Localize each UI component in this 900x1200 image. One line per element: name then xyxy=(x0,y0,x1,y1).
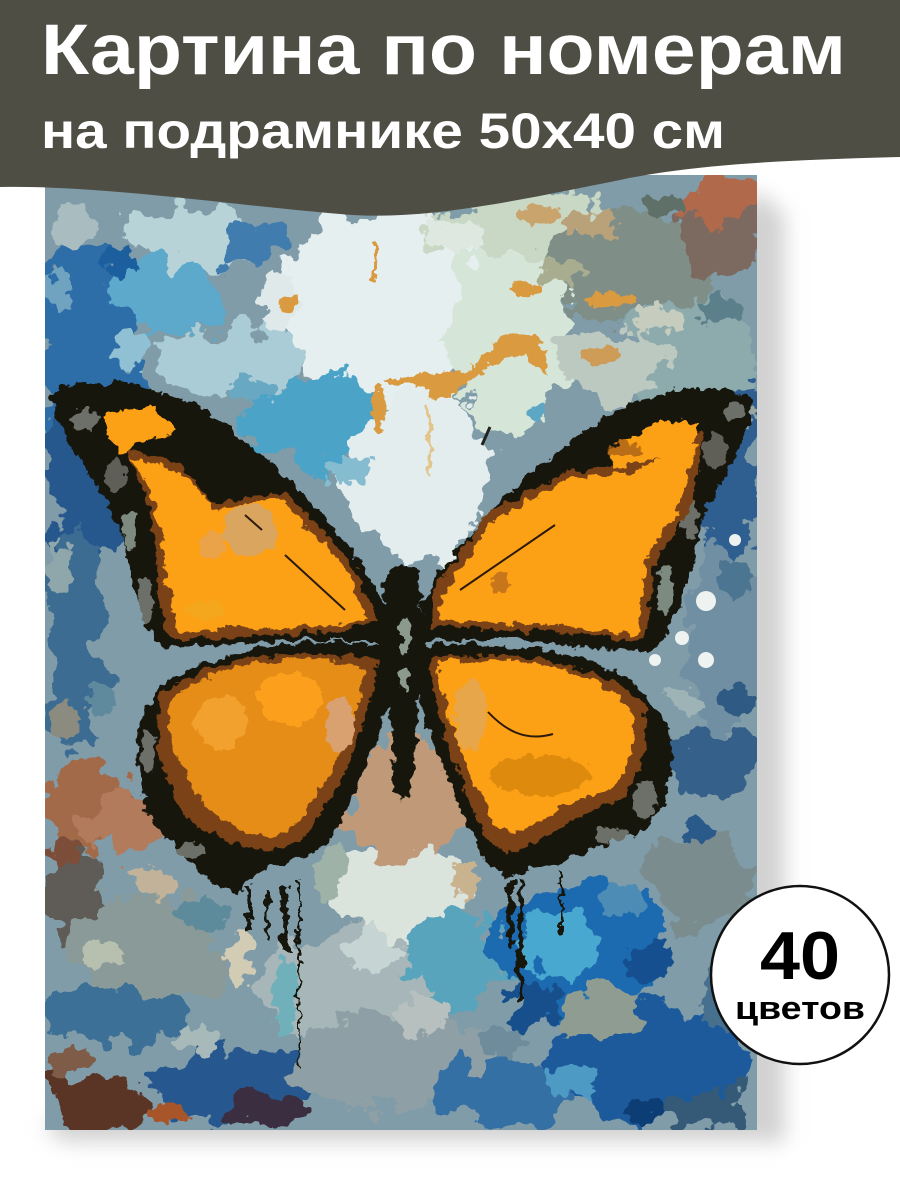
butterfly: brown wing rims xyxy=(125,430,705,851)
butterfly: orange wings xyxy=(100,405,700,836)
badge: 40 colours: цветов xyxy=(735,990,865,1026)
badge: 40 colours: 40 xyxy=(760,918,840,994)
badge: 40 colours xyxy=(711,886,889,1064)
canvas shadow xyxy=(45,190,785,1142)
orange splatter xyxy=(279,205,636,475)
title: Картина по номерам xyxy=(41,11,846,90)
subtitle: на подрамнике 50х40 см xyxy=(41,103,725,159)
small mottled paint patches xyxy=(46,195,753,1125)
white splashes xyxy=(649,534,741,668)
butterfly xyxy=(50,383,752,1070)
butterfly: dark wings xyxy=(50,383,752,1070)
painting xyxy=(45,175,757,1130)
butterfly: wing highlights and veins xyxy=(183,443,643,795)
painted background xyxy=(45,175,757,1130)
butterfly: mottled grey wing edges xyxy=(71,402,745,858)
header band xyxy=(0,0,900,216)
